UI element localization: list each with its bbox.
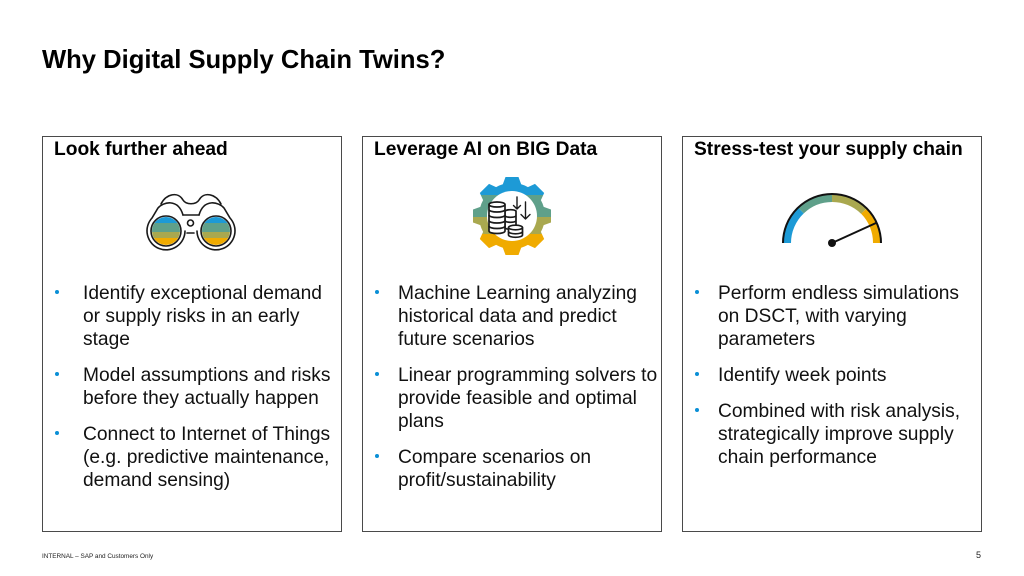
bullet text: internet of things: demand sensing) [83,470,230,491]
bullet text: internet of things: Connect to Internet of Things [83,424,330,445]
heading: look further ahead: Look further ahead [54,139,228,160]
bullet marker 1 [695,290,699,294]
bullet text: machine learning: historical data and predict [398,306,617,327]
bullet text: risk analysis: Combined with risk analysis, [718,401,960,422]
icon: binoculars [146,194,236,251]
bullet marker 2 [695,372,699,376]
bullet marker 3 [695,408,699,412]
bullet text: linear programming: Linear programming solvers to [398,365,657,386]
bullet text: risk analysis [718,401,960,468]
bullet text: model assumptions: before they actually happen [83,388,319,409]
bullet text: risk analysis: strategically improve supply [718,424,954,445]
panel: stress-test [682,136,982,532]
bullet text: linear programming: plans [398,411,444,432]
bullet text: machine learning [398,283,637,350]
bullet marker 3 [375,454,379,458]
bullet text: simulations: on DSCT, with varying [718,306,907,327]
footer note: INTERNAL – SAP and Customers Only [42,553,153,560]
bullet text: simulations: parameters [718,329,815,350]
bullet marker 2 [375,372,379,376]
bullet text: risk analysis: chain performance [718,447,877,468]
icon: gauge [782,193,882,247]
page number: 5 [976,550,981,560]
bullet text: internet of things: (e.g. predictive maintenance, [83,447,329,468]
bullet text: simulations: Perform endless simulations [718,283,959,304]
bullet marker 3 [55,431,59,435]
title: Why Digital Supply Chain Twins? [42,46,445,74]
bullet text: compare scenarios: Compare scenarios on [398,447,591,468]
panel: leverage AI [362,136,662,532]
bullet text: machine learning: future scenarios [398,329,535,350]
bullet text: compare scenarios: profit/sustainability [398,470,556,491]
bullet marker 1 [55,290,59,294]
bullet text: identify risks: or supply risks in an early [83,306,299,327]
bullet text: linear programming: provide feasible and optimal [398,388,637,409]
bullet text: identify risks: stage [83,329,130,350]
bullet text: linear programming [398,365,657,432]
heading: stress-test: Stress-test your supply chain [694,139,963,160]
bullet text: model assumptions: Model assumptions and risks [83,365,330,386]
bullet text: compare scenarios [398,447,591,491]
panel: look further ahead [42,136,342,532]
bullet text: machine learning: Machine Learning analyzing [398,283,637,304]
icon: gear with coins [473,177,551,255]
bullet text: identify risks: Identify exceptional demand [83,283,322,304]
heading: leverage AI: Leverage AI on BIG Data [374,139,597,160]
bullet marker 2 [55,372,59,376]
bullet text: identify risks [83,283,322,350]
bullet text: internet of things [83,424,330,491]
bullet text: week points: Identify week points [718,365,887,386]
bullet text: model assumptions [83,365,330,409]
bullet marker 1 [375,290,379,294]
bullet text: simulations [718,283,959,350]
